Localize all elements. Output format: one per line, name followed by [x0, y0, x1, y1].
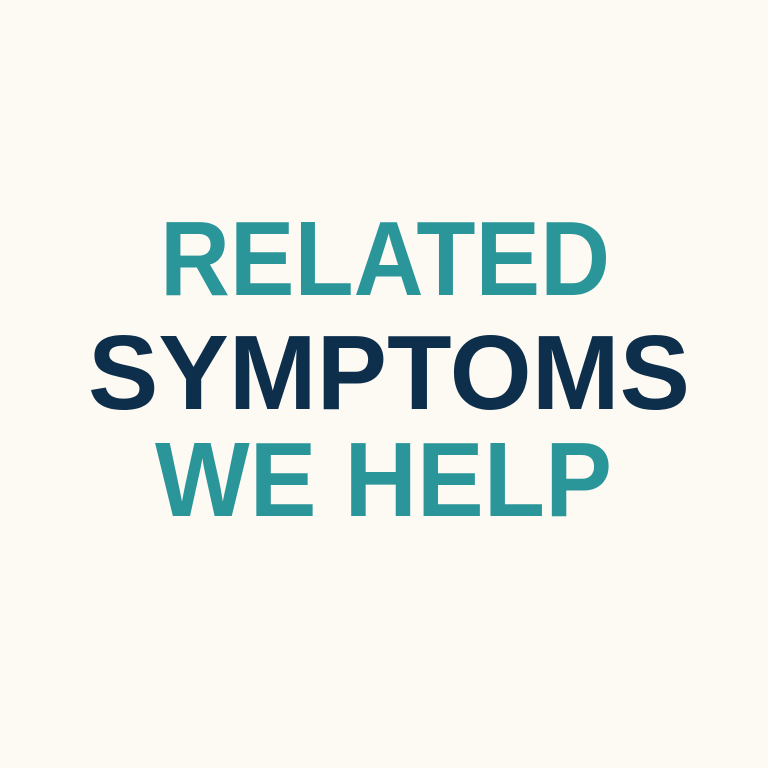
- heading line 3: WE HELP: WE HELP: [155, 421, 612, 539]
- heading line 1: RELATED: RELATED: [160, 200, 610, 318]
- heading line 2: SYMPTOMS: SYMPTOMS: [88, 314, 690, 432]
